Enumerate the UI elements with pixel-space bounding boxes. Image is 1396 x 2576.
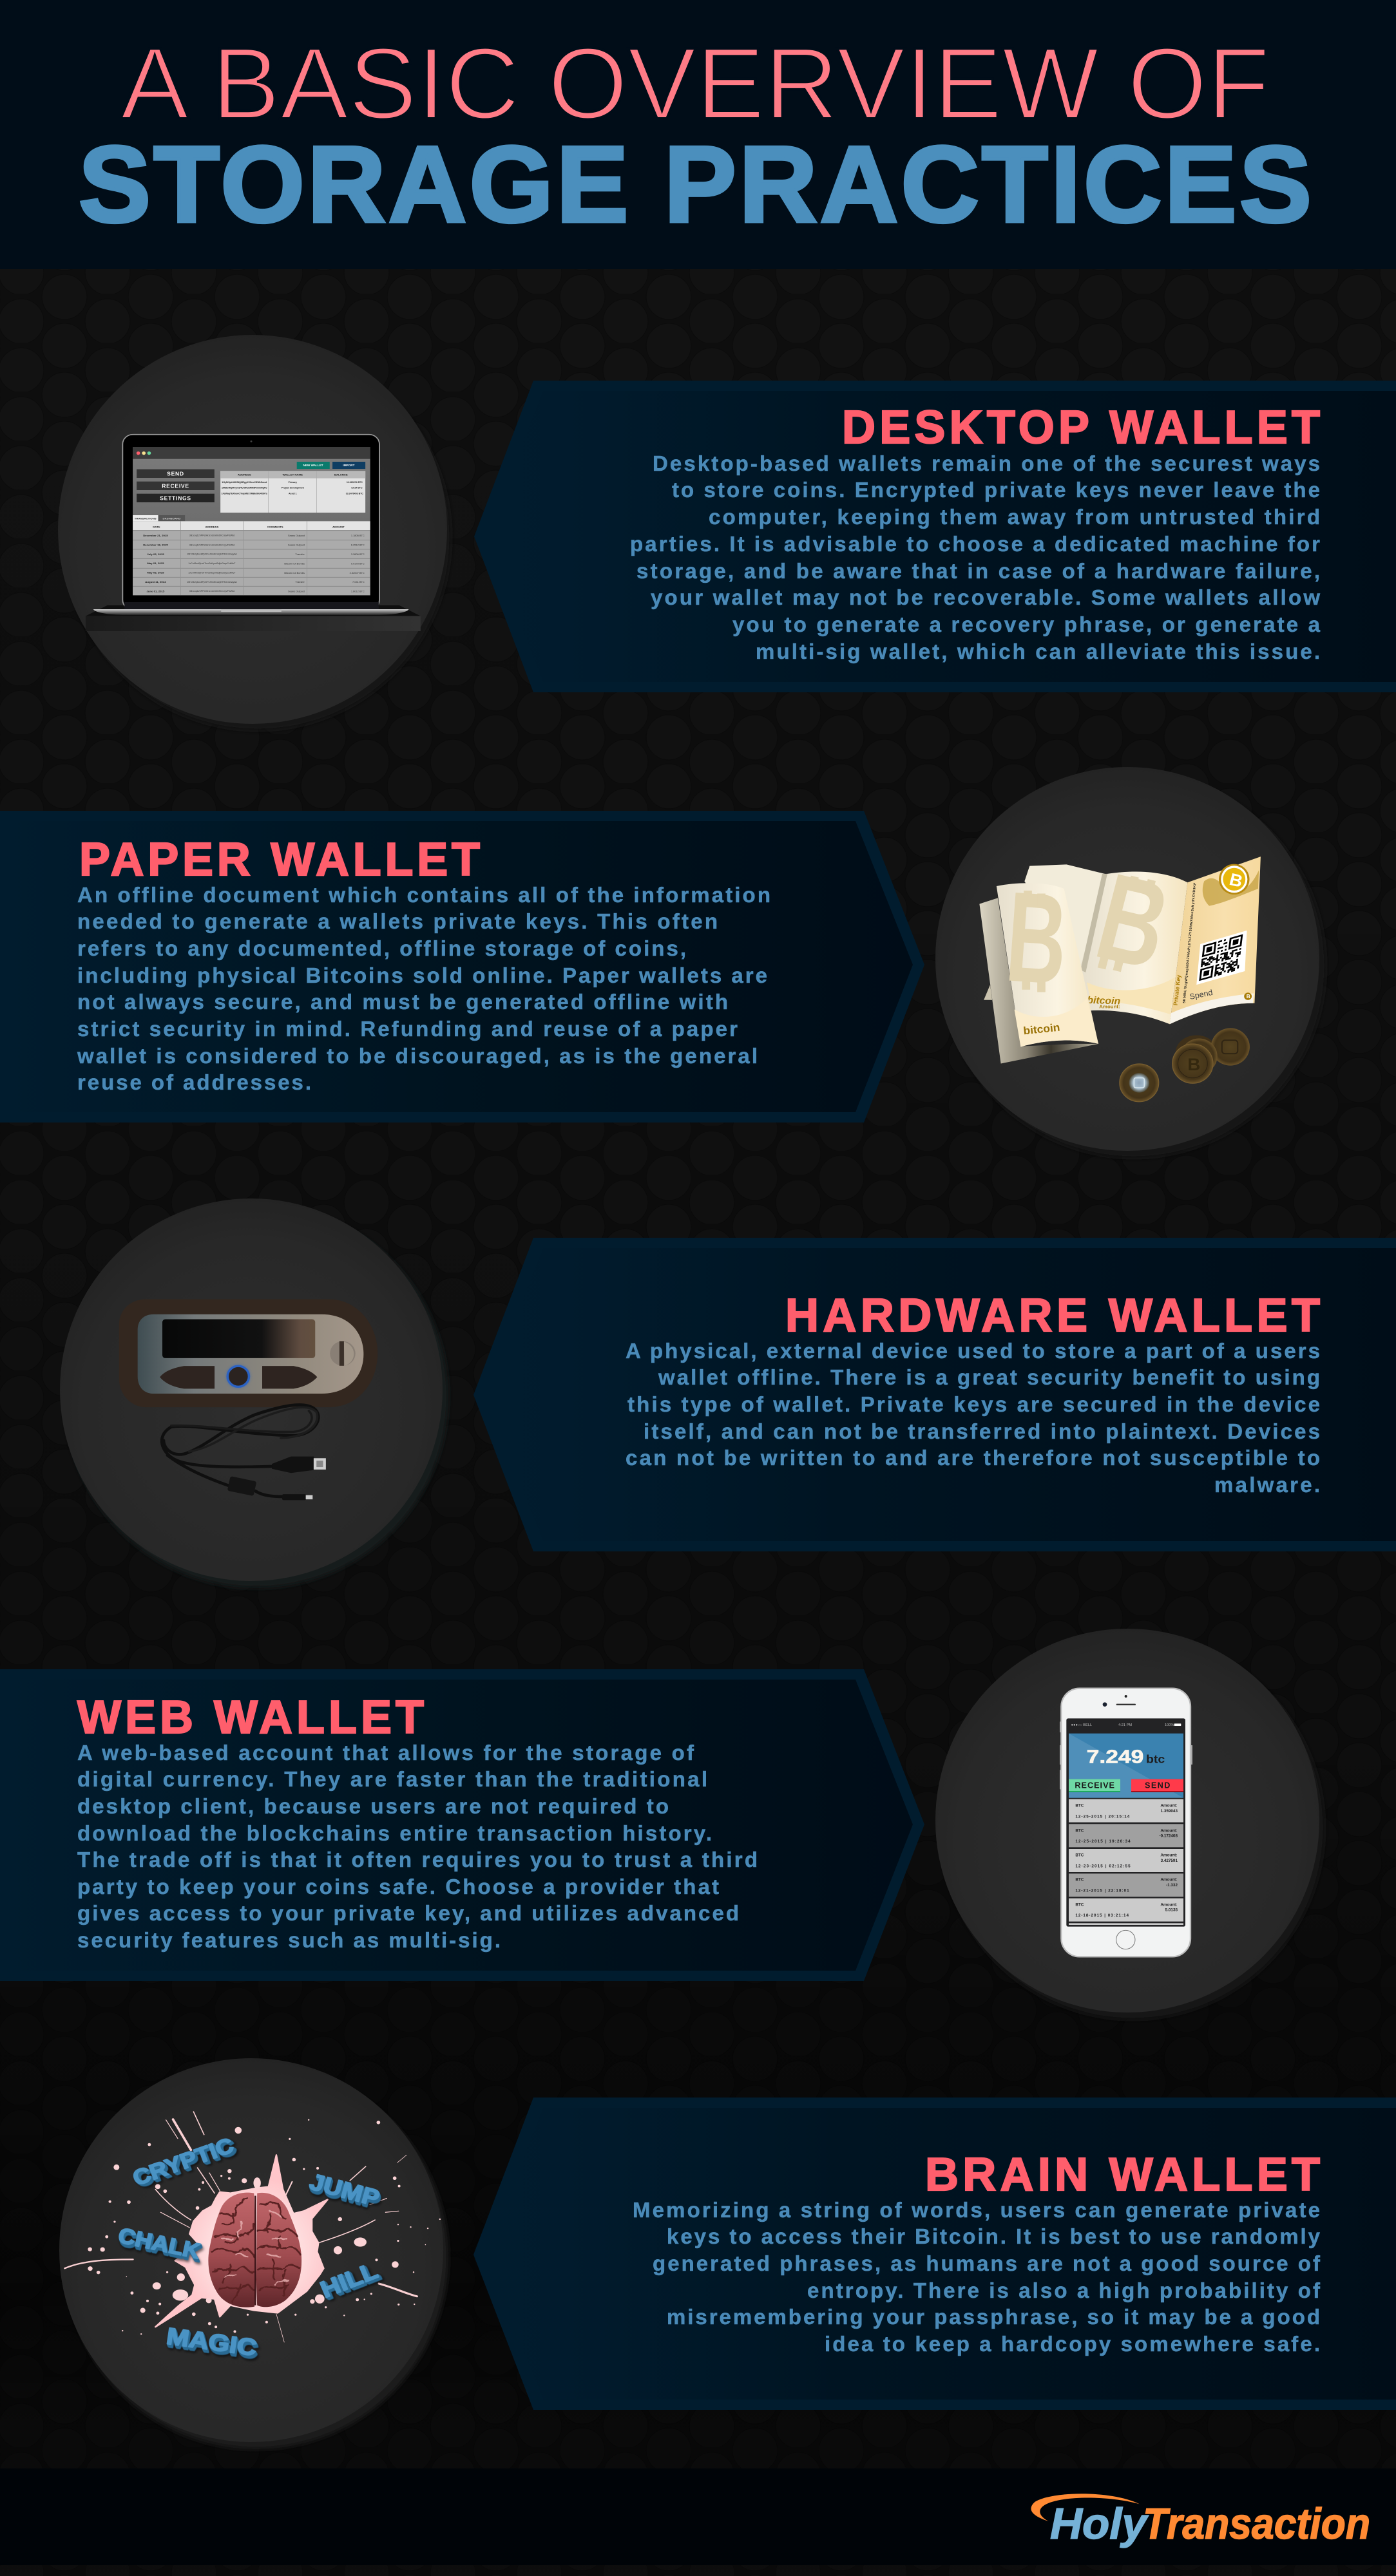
icon: laptop with wallet app: 1M723Upbo18PpXFHJ9mSCdcyETR1K4JnayA6 bbox=[187, 581, 237, 583]
icon: laptop with wallet app: Transfer bbox=[295, 581, 305, 583]
text block: web wallet description: The trade off is that it often requires you to trust a third bbox=[77, 1848, 758, 1871]
icon: hardware wallet device and usb cable bbox=[119, 1299, 378, 1500]
icon: laptop with wallet app: DATE bbox=[153, 525, 160, 528]
text block: paper wallet description: wallet is considered to be discouraged, as is the general bbox=[77, 1044, 758, 1068]
icon: smartphone wallet app: Amount: bbox=[1160, 1828, 1177, 1833]
text block: brain wallet description: keys to access their Bitcoin. It is best to use randomly bbox=[667, 2224, 1321, 2248]
icon: laptop with wallet app: 3.3806 BTC bbox=[351, 553, 365, 556]
text block: web wallet description: gives access to your private key, and utilizes advanced bbox=[77, 1901, 739, 1925]
heading: paper wallet: PAPER WALLET bbox=[79, 834, 480, 886]
text block: paper wallet description: reuse of addresses. bbox=[77, 1070, 311, 1094]
icon: paper wallet and physical coins: B bbox=[1002, 864, 1072, 1011]
text block: paper wallet description: needed to generate a wallets private keys. This often bbox=[77, 909, 718, 933]
icon: paper wallet and physical coins: Spend bbox=[1189, 988, 1214, 1001]
paint splatter bbox=[64, 2112, 441, 2342]
text block: hardware wallet description: can not be written to and are therefore not susceptible to bbox=[626, 1446, 1320, 1470]
icon: smartphone wallet app bbox=[1060, 1689, 1192, 1956]
medallion: desktop wallet bbox=[58, 335, 451, 730]
panel: web wallet bbox=[0, 1669, 924, 1981]
icon: laptop with wallet app: May 01, 2015 bbox=[147, 562, 164, 565]
icon: laptop with wallet app: 1xCmRwdQnvhTmvSnlLpmBdjtvGaycCckMcT bbox=[188, 572, 236, 574]
icon: laptop with wallet app: 1xCmRwdQnvhTmvSnlLpmBdjtvGaycCckMcT bbox=[188, 562, 236, 565]
icon: smartphone wallet app: BTC bbox=[1075, 1828, 1084, 1833]
icon: smartphone wallet app: BTC bbox=[1075, 1804, 1084, 1808]
panel: paper wallet bbox=[0, 811, 924, 1122]
text block: brain wallet description: Memorizing a string of words, users can generate private bbox=[633, 2198, 1320, 2222]
icon: laptop with wallet app: December 21, 2015 bbox=[143, 534, 168, 537]
icon: paper wallet and physical coins: B bbox=[1227, 869, 1245, 891]
text block: desktop wallet description: to store coins. Encrypted private keys never leave the bbox=[672, 478, 1320, 502]
text block: web wallet description: party to keep your coins safe. Choose a provider that bbox=[77, 1875, 719, 1899]
icon: smartphone wallet app: BTC bbox=[1075, 1902, 1084, 1907]
icon: smartphone wallet app: Amount: bbox=[1160, 1804, 1177, 1808]
icon: laptop with wallet app: July 02, 2015 bbox=[147, 553, 164, 556]
icon: laptop with wallet app: 2.32007 BTC bbox=[350, 572, 365, 574]
icon: smartphone wallet app: 12-25-2015 | 20:15:14 bbox=[1075, 1814, 1130, 1819]
icon: smartphone wallet app: 4:21 PM bbox=[1118, 1723, 1132, 1727]
heading: hardware wallet: HARDWARE WALLET bbox=[785, 1290, 1320, 1341]
icon: laptop with wallet app: Seans Outpost bbox=[288, 535, 305, 537]
logo wordmark: holy: Holy bbox=[1050, 2499, 1149, 2548]
icon: smartphone wallet app: 12-25-2015 | 19:26:34 bbox=[1075, 1839, 1131, 1844]
word: cryptic: CRYPTIC bbox=[129, 2134, 237, 2191]
panel: hardware wallet bbox=[473, 1238, 1396, 1551]
icon: paper wallet and physical coins: B bbox=[1247, 994, 1250, 999]
medallion: web wallet bbox=[935, 1629, 1324, 2020]
icon: laptop with wallet app: SETTINGS bbox=[160, 495, 191, 502]
icon: laptop with wallet app: Asset 1 bbox=[289, 493, 297, 495]
text block: web wallet description: security features such as multi-sig. bbox=[77, 1928, 501, 1952]
icon: paper wallet and physical coins: B bbox=[1187, 1055, 1200, 1074]
icon: laptop with wallet app: AMOUNT bbox=[332, 525, 345, 528]
icon: smartphone wallet app: 1.359043 bbox=[1161, 1809, 1178, 1814]
text block: paper wallet description: strict security in mind. Refunding and reuse of a paper bbox=[77, 1017, 738, 1041]
icon: laptop with wallet app: 1.8012 BTC bbox=[351, 590, 365, 592]
icon: laptop with wallet app: IMPORT bbox=[343, 464, 355, 467]
text block: desktop wallet description: you to generate a recovery phrase, or generate a bbox=[732, 612, 1321, 636]
icon: laptop with wallet app: December 18, 2015 bbox=[143, 544, 168, 547]
text block: desktop wallet description: your wallet may not be recoverable. Some wallets allow bbox=[651, 585, 1320, 609]
icon: laptop with wallet app: 1HyfU3pL86CfNQHRgyXXXncXDWkfhnxd bbox=[222, 481, 267, 484]
icon: paper wallet and physical coins: B bbox=[1084, 848, 1182, 996]
icon: laptop with wallet app: Seans Outpost bbox=[288, 544, 305, 547]
panel: brain wallet bbox=[473, 2098, 1396, 2410]
icon: laptop with wallet app: 33.2476453 BTC bbox=[346, 493, 363, 495]
icon: laptop with wallet app bbox=[86, 435, 421, 631]
text block: paper wallet description: not always secure, and must be generated offline with bbox=[77, 990, 728, 1014]
icon: laptop with wallet app: 3B1cuq12hPPeb9rzrJobG0GShCoyVFfsWtd bbox=[189, 590, 234, 592]
icon: smartphone wallet app: BTC bbox=[1075, 1853, 1084, 1858]
icon: laptop with wallet app: SEND bbox=[167, 471, 184, 477]
icon: smartphone wallet app: 12-23-2015 | 02:12:55 bbox=[1075, 1864, 1131, 1868]
icon: smartphone wallet app: 12-21-2015 | 22:18:01 bbox=[1075, 1888, 1129, 1893]
icon: smartphone wallet app: BTC bbox=[1075, 1878, 1084, 1882]
icon: laptop with wallet app: 11.023074 BTC bbox=[347, 481, 363, 484]
usb cable bbox=[162, 1405, 318, 1497]
word: jump: JUMP bbox=[307, 2170, 382, 2211]
icon: paper wallet and physical coins: bitcoin bbox=[1023, 1021, 1060, 1037]
text block: desktop wallet description: storage, and be aware that in case of a hardware failure, bbox=[636, 559, 1320, 583]
icon: smartphone wallet app: Amount: bbox=[1160, 1902, 1177, 1907]
text block: brain wallet description bbox=[633, 2198, 1321, 2356]
icon: smartphone wallet app: RECEIVE bbox=[1075, 1781, 1114, 1790]
icon: smartphone wallet app: 3.427591 bbox=[1161, 1859, 1178, 1863]
text block: hardware wallet description: this type of wallet. Private keys are secured in the device bbox=[627, 1392, 1320, 1416]
icon: laptop with wallet app: Bitcoin not Bombs bbox=[284, 562, 305, 565]
text block: brain wallet description: entropy. There is also a high probability of bbox=[807, 2278, 1321, 2302]
text block: hardware wallet description: wallet offline. There is a great security benefit to using bbox=[658, 1365, 1320, 1389]
icon: laptop with wallet app: 1M723Upbo18PpXFHJ9mSCdcyETR1K4JnayA6 bbox=[187, 553, 237, 556]
icon: smartphone wallet app: 5.0135 bbox=[1165, 1908, 1178, 1913]
logo swoosh bbox=[1031, 2494, 1140, 2521]
icon: laptop with wallet app: BALANCE bbox=[334, 473, 348, 476]
text block: web wallet description: download the blockchains entire transaction history. bbox=[77, 1821, 712, 1845]
icon: laptop with wallet app: TRANSACTIONS bbox=[135, 517, 157, 520]
icon: smartphone wallet app: btc bbox=[1146, 1752, 1165, 1765]
text block: paper wallet description bbox=[77, 883, 770, 1094]
icon: paper wallet and physical coins: bitcoin bbox=[1087, 995, 1120, 1007]
text block: desktop wallet description: multi-sig wallet, which can alleviate this issue. bbox=[756, 639, 1320, 663]
icon: smartphone wallet app: 12-18-2015 | 03:21:14 bbox=[1075, 1913, 1129, 1918]
icon: smartphone wallet app: Amount: bbox=[1160, 1853, 1177, 1858]
icon: laptop with wallet app: Primary bbox=[289, 481, 297, 484]
icon: smartphone wallet app: 100% bbox=[1165, 1723, 1174, 1727]
text block: brain wallet description: generated phrases, as humans are not a good source of bbox=[653, 2251, 1321, 2275]
panel: desktop wallet bbox=[474, 381, 1396, 692]
header band bbox=[0, 0, 1396, 269]
text block: hardware wallet description bbox=[626, 1339, 1320, 1497]
heading: desktop wallet: DESKTOP WALLET bbox=[842, 402, 1320, 453]
device body bbox=[119, 1299, 378, 1407]
text block: hardware wallet description: malware. bbox=[1214, 1473, 1320, 1497]
text block: hardware wallet description: itself, and can not be transferred into plaintext. Devices bbox=[644, 1419, 1320, 1443]
icon: laptop with wallet app: Bitcoin not Bombs bbox=[284, 572, 305, 574]
icon: smartphone wallet app: SEND bbox=[1145, 1781, 1170, 1790]
text block: brain wallet description: idea to keep a hardcopy somewhere safe. bbox=[825, 2332, 1320, 2356]
medallion: brain wallet bbox=[59, 2058, 448, 2449]
icon: smartphone wallet app: 7.249 bbox=[1087, 1747, 1143, 1767]
icon: paper wallet and physical coins: Private Key bbox=[1172, 974, 1182, 1006]
icon: brain with paint splatter and 3d words bbox=[64, 2112, 441, 2361]
heading: brain wallet: BRAIN WALLET bbox=[925, 2149, 1320, 2201]
text block: desktop wallet description: parties. It is advisable to choose a dedicated machine for bbox=[630, 532, 1320, 556]
icon: laptop with wallet app: WALLET NAME bbox=[283, 473, 303, 476]
text block: paper wallet description: An offline document which contains all of the information bbox=[77, 883, 770, 907]
text block: web wallet description: A web-based account that allows for the storage of bbox=[77, 1741, 694, 1765]
icon: laptop with wallet app: June 01, 2015 bbox=[147, 589, 165, 592]
text block: desktop wallet description: Desktop-based wallets remain one of the securest ways bbox=[653, 451, 1320, 475]
icon: laptop with wallet app: COMMENTS bbox=[267, 525, 283, 528]
word: chalk: CHALK bbox=[116, 2223, 202, 2264]
word: magic: MAGIC bbox=[165, 2323, 258, 2361]
icon: laptop with wallet app: Seans Outpost bbox=[288, 590, 305, 592]
icon: paper wallet and physical coins bbox=[979, 848, 1261, 1102]
icon: laptop with wallet app: 7.041 BTC bbox=[352, 581, 365, 583]
title line: storage practices: STORAGE PRACTICES bbox=[79, 124, 1312, 245]
icon: laptop with wallet app: ADDRESS bbox=[238, 473, 251, 476]
icon: laptop with wallet app: 3B1cuq12hPPeb9rzrJobG0GShCoyVFfsWtd bbox=[189, 535, 234, 537]
medallion: paper wallet bbox=[935, 767, 1326, 1158]
text block: paper wallet description: including physical Bitcoins sold online. Paper wallets are bbox=[77, 963, 767, 987]
medallion: hardware wallet bbox=[60, 1198, 448, 1588]
icon: laptop with wallet app: 1FzWaqTEXhonCYvjeMdX7MBkJ6G4f997s bbox=[222, 493, 267, 495]
icon: laptop with wallet app: NEW WALLET bbox=[303, 464, 323, 467]
brain bbox=[208, 2193, 301, 2307]
icon: laptop with wallet app: RECEIVE bbox=[162, 483, 189, 489]
icon: laptop with wallet app: 1.1805 BTC bbox=[351, 535, 365, 537]
icon: smartphone wallet app: -0.172408 bbox=[1159, 1834, 1178, 1839]
icon: laptop with wallet app: 0.0175 BTC bbox=[351, 562, 365, 565]
icon: paper wallet and physical coins: 5Kb8kLf9zgWQnogidDA76MzPL6TsZZY36hWXMssSzNydYXYB9KF bbox=[1182, 883, 1197, 1003]
icon: smartphone wallet app: -1.332 bbox=[1166, 1883, 1178, 1888]
text block: desktop wallet description: computer, keeping them away from untrusted third bbox=[709, 505, 1320, 529]
icon: smartphone wallet app: Amount: bbox=[1160, 1878, 1177, 1882]
text block: brain wallet description: misremembering your passphrase, so it may be a good bbox=[667, 2305, 1320, 2329]
icon: laptop with wallet app: ADDRESS bbox=[205, 525, 219, 528]
icon: laptop with wallet app: 1MdEnMpRhymS4Ur5KdsRM8RmnkNgHo bbox=[222, 486, 267, 489]
title line: a basic overview of: A BASIC OVERVIEW OF bbox=[120, 27, 1270, 140]
footer band bbox=[0, 2468, 1396, 2565]
logo: holytransaction bbox=[1031, 2494, 1370, 2548]
logo wordmark: transaction: Transaction bbox=[1143, 2499, 1370, 2548]
text block: web wallet description: desktop client, because users are not required to bbox=[77, 1794, 669, 1818]
heading: web wallet: WEB WALLET bbox=[77, 1692, 424, 1743]
text block: web wallet description bbox=[77, 1741, 758, 1952]
text block: desktop wallet description bbox=[630, 451, 1321, 663]
icon: laptop with wallet app: Project development bbox=[282, 486, 305, 489]
icon: laptop with wallet app: DASHBOARD bbox=[163, 517, 180, 520]
icon: laptop with wallet app: 3B1cuq12hPPeb9rzrJobG0GShCoyVFfsWtd bbox=[189, 544, 234, 547]
word: hill: HILL bbox=[316, 2257, 381, 2303]
icon: paper wallet and physical coins: Amount: bbox=[1099, 1004, 1120, 1009]
text block: web wallet description: digital currency. They are faster than the traditional bbox=[77, 1767, 707, 1791]
icon: laptop with wallet app: 6.2512 BTC bbox=[351, 544, 365, 547]
icon: laptop with wallet app: May 03, 2015 bbox=[147, 571, 164, 574]
icon: smartphone wallet app: ●●●○○ BELL bbox=[1071, 1723, 1092, 1727]
icon: laptop with wallet app: 5.614 BTC bbox=[351, 486, 363, 489]
text block: hardware wallet description: A physical, external device used to store a part of a users bbox=[626, 1339, 1320, 1363]
icon: laptop with wallet app: Transfer bbox=[295, 553, 305, 556]
icon: laptop with wallet app: August 11, 2014 bbox=[145, 580, 166, 583]
text block: paper wallet description: refers to any documented, offline storage of coins, bbox=[77, 936, 686, 960]
